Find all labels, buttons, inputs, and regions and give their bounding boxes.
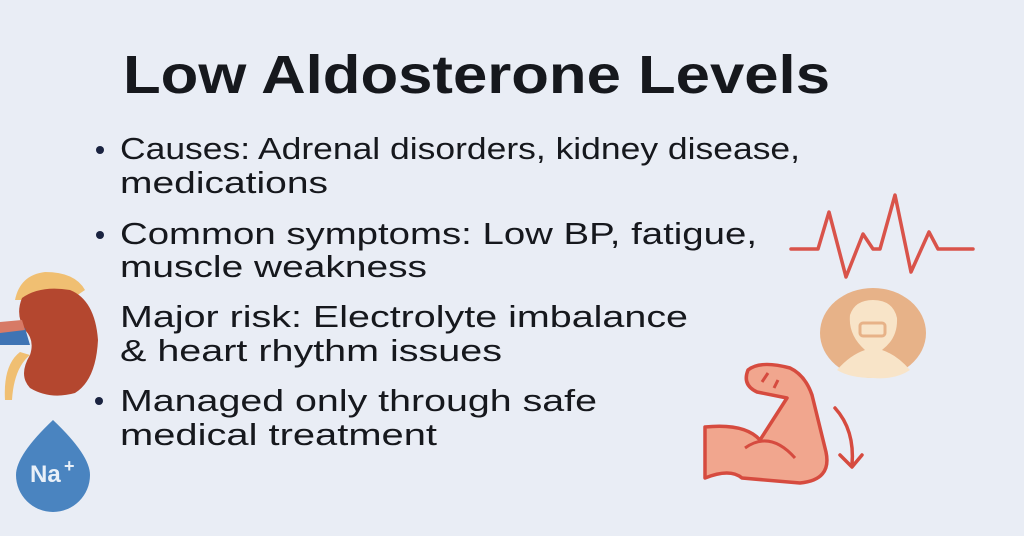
icon: kidney [0, 272, 98, 400]
bullet: risk: & heart rhythm issues [120, 333, 502, 368]
bullet: causes [96, 131, 800, 200]
bullet: causes: medications [120, 165, 328, 200]
icon: muscle arm [705, 364, 827, 483]
bullet: causes: Causes: Adrenal disorders, kidney disease, [120, 131, 800, 166]
icon: sodium drop: + [64, 456, 75, 476]
title: Low Aldosterone Levels [123, 45, 830, 105]
bullet: symptoms: muscle weakness [120, 249, 427, 284]
bullet: managed: medical treatment [120, 417, 437, 452]
bullet: managed [95, 383, 597, 452]
bullet list [95, 131, 800, 452]
bullet: symptoms [96, 216, 757, 284]
bullet: symptoms: Common symptoms: Low BP, fatigue, [120, 216, 757, 251]
icon: heartbeat [791, 195, 973, 277]
icon: sodium drop [16, 420, 90, 512]
bullet: risk [120, 299, 688, 368]
icon: sodium drop: Na [30, 461, 61, 488]
bullet: managed: Managed only through safe [120, 383, 597, 418]
icon: down arrow [835, 408, 862, 467]
icon: face [820, 288, 926, 378]
bullet: risk: Major risk: Electrolyte imbalance [120, 299, 688, 334]
